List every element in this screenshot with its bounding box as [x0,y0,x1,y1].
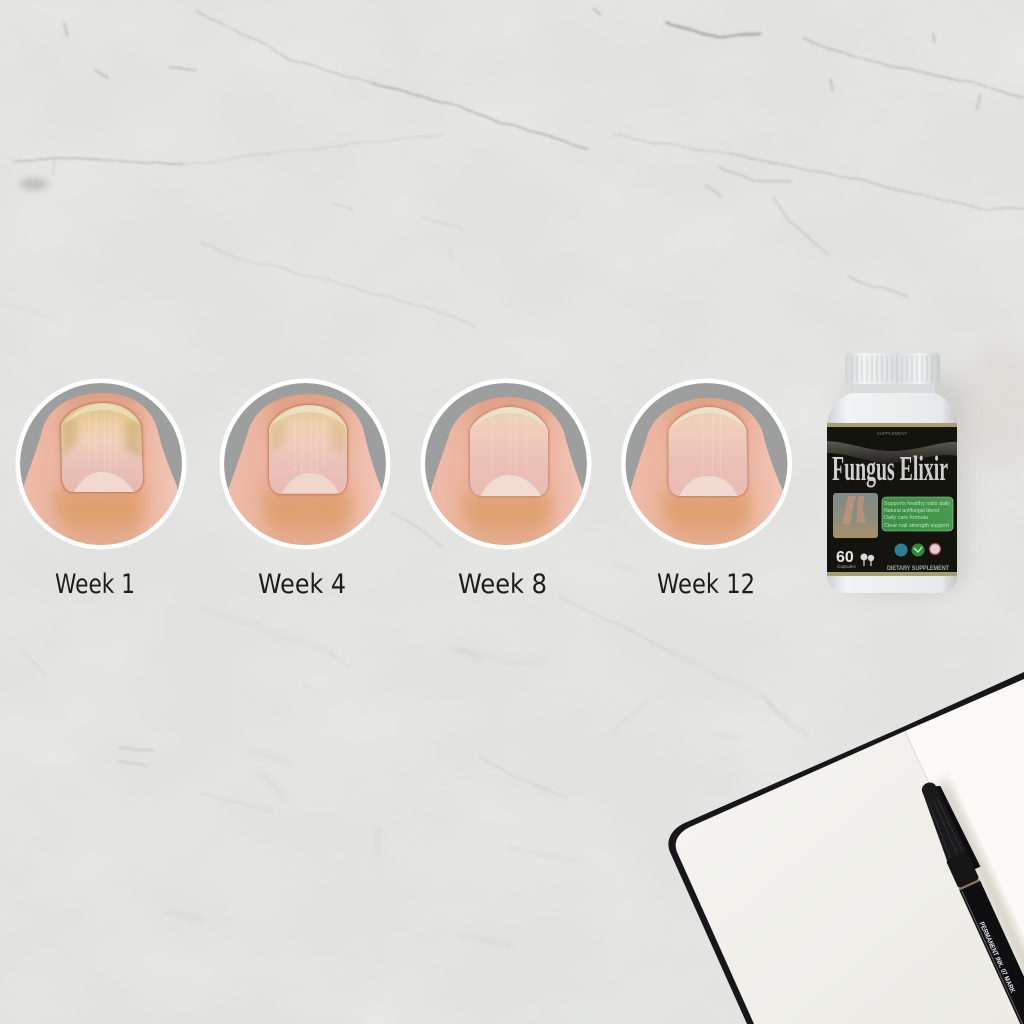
progress circle: week 8 [420,378,592,554]
foot photo [833,493,878,538]
nail plate [60,402,144,493]
pen imprint: PERMANENT INK. 07 MARK [977,921,1016,994]
lunula [282,473,339,493]
finger [431,397,583,554]
bottle body [827,393,957,593]
product label: DIETARY SUPPLEMENT [887,566,949,572]
bottle cap [845,353,940,396]
capsule count: 60 [836,549,854,566]
progress circle: week 12 [621,378,792,554]
green benefits panel: Clear nail strength support [884,523,950,529]
label: week 4: Week 4 [258,569,346,600]
label: week 12: Week 12 [657,569,755,600]
lunula [74,472,134,492]
product label: Capsules [837,564,857,569]
green benefits panel: Daily care formula [884,515,928,521]
green benefits panel: Natural antifungal blend [884,508,939,514]
green benefits panel [882,497,953,531]
notebook cover edge [668,672,1024,1024]
product label: SUPPLEMENT [877,431,908,436]
product label [827,423,957,576]
supplement bottle [827,353,967,594]
notebook [668,672,1024,1024]
pen cap [914,780,967,862]
lunula [481,475,541,496]
progress circle: week 1 [16,378,186,554]
lunula [680,476,738,496]
progress circle: week 4 [220,378,390,554]
pen barrel [959,881,1024,1024]
tree icons [860,554,874,566]
left page [676,731,1024,1024]
label: week 1: Week 1 [55,569,135,600]
finger [229,394,381,554]
pen clip [935,783,980,870]
green benefits panel: Supports healthy nails daily [884,501,951,507]
finger [23,393,177,554]
label: week 8: Week 8 [458,569,547,600]
nail plate [268,404,348,495]
finger [630,398,782,554]
badge icons [894,544,940,556]
right page [905,679,1024,990]
nail plate [469,406,549,497]
pen [913,775,1024,1024]
nail plate [668,406,748,497]
